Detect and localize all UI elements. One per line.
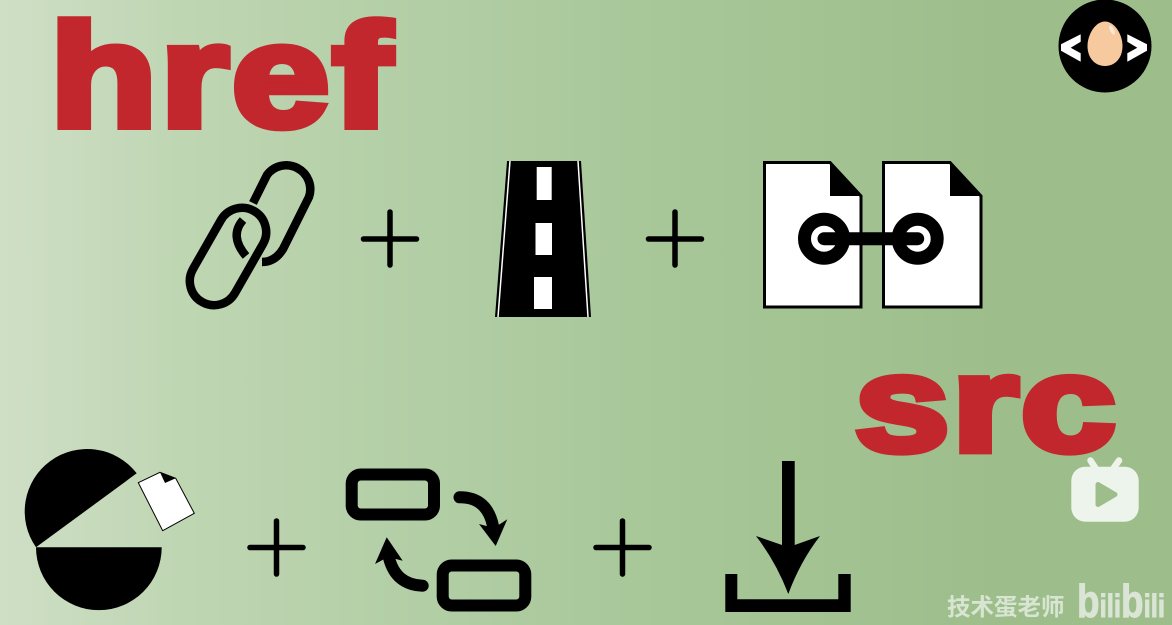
logo: egg with angle brackets [1058,0,1152,92]
plus sign: road and documents [648,212,702,265]
icon: replacing boxes cycle [352,474,525,606]
watermark: author name: 技术蛋老师 [947,594,1064,620]
heading: src: src [855,327,1118,480]
plus sign: link and road [364,212,416,265]
icon: download arrow [725,461,851,612]
icon: road [495,161,591,317]
icon: bilibili tv [1071,460,1139,522]
plus sign: exchange and download [596,521,649,574]
icon: two linked documents [764,161,982,307]
icon: chain link [190,165,310,305]
plus sign: mouth and exchange [250,521,303,574]
icon: open mouth swallowing document [25,449,194,610]
